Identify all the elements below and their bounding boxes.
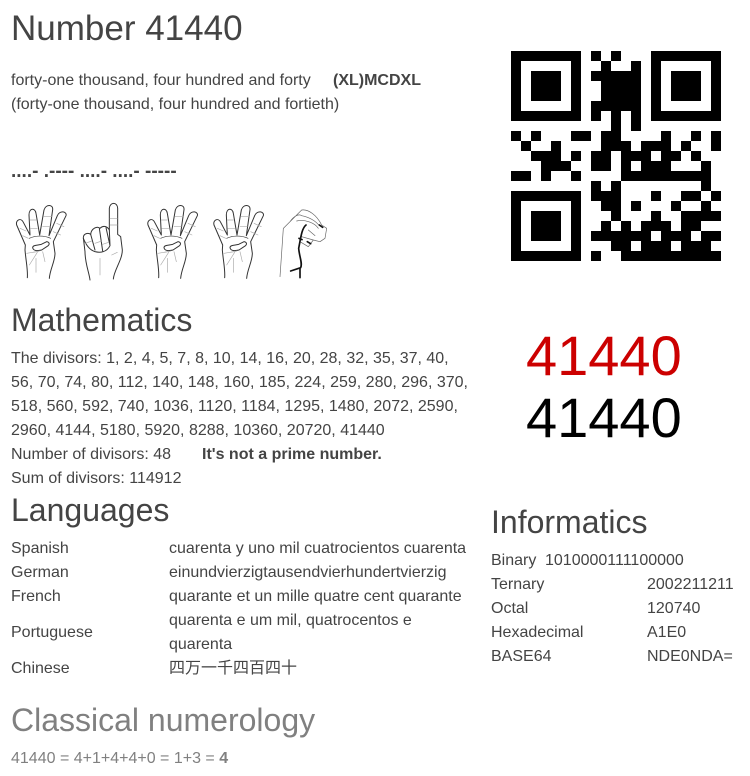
languages table [11,540,466,677]
divisors text: It's not a prime number. [202,446,382,463]
morse code: ....- .---- ....- ....- ----- [11,161,177,182]
language: Spanish: cuarenta y uno mil cuatrocientos cuarenta [169,540,466,557]
language: Spanish: Spanish [11,540,69,557]
heading: Classical numerology: Classical numerology [11,702,315,738]
heading: Informatics: Informatics [491,504,647,540]
language: French: quarante et un mille quatre cent quarante [169,588,462,605]
number red: 41440 [526,324,682,387]
binary [491,552,684,569]
divisors text: 2960, 4144, 5180, 5920, 8288, 10360, 20720, 41440 [11,422,385,439]
language: German [11,564,446,581]
icon: hand sign four [148,205,197,278]
language: French [11,588,462,605]
language: Chinese: 四万一千四百四十 [169,660,297,677]
icon: hand sign four [16,205,66,278]
informatics table [491,552,734,665]
informatics table: 2002211211 [647,576,734,593]
number black: 41440 [526,386,682,449]
heading: Mathematics: Mathematics [11,302,192,338]
language: French: French [11,588,61,605]
octal [491,600,700,617]
base64 [491,648,733,665]
number in words: (XL)MCDXL [333,72,421,89]
icon: hand sign zero [280,210,327,278]
number in words: forty-one thousand, four hundred and forty [11,72,311,89]
language: Portuguese: quarenta [169,636,232,653]
numerology sum: 41440 = 4+1+4+4+0 = 1+3 = 4 [11,750,228,767]
language: Portuguese [11,612,412,653]
base64: BASE64 [491,648,551,665]
icon: hand sign four [214,205,263,278]
language: Chinese [11,659,297,677]
title: Number 41440 [11,9,243,48]
divisors text: The divisors: 1, 2, 4, 5, 7, 8, 10, 14, 16, 20, 28, 32, 35, 37, 40, [11,350,449,367]
hexadecimal [491,624,686,641]
language: German: German [11,564,69,581]
divisors text: Number of divisors: 48 [11,446,171,463]
informatics table: A1E0 [647,624,686,641]
divisors text: 518, 560, 592, 740, 1036, 1120, 1184, 1295, 1480, 2072, 2590, [11,398,458,415]
hexadecimal: Hexadecimal [491,624,583,641]
language: Chinese: Chinese [11,660,70,677]
heading: Languages: Languages [11,492,169,528]
language: Spanish [11,540,466,557]
divisors text: 56, 70, 74, 80, 112, 140, 148, 160, 185, 224, 259, 280, 296, 370, [11,374,468,391]
ternary [491,576,734,593]
sign language hands [16,202,327,280]
language: Portuguese: Portuguese [11,624,93,641]
QR code [511,51,721,261]
informatics table: 1010000111100000 [545,552,684,569]
language: Portuguese: quarenta e um mil, quatrocentos e [169,612,412,629]
divisors text [11,350,468,487]
icon: hand sign one [83,203,122,280]
informatics table: NDE0NDA= [647,648,733,665]
number in words [11,72,421,113]
ternary: Ternary [491,576,544,593]
language: German: einundvierzigtausendvierhundertvierzig [169,564,446,581]
informatics table: 120740 [647,600,700,617]
number in words: (forty-one thousand, four hundred and fortieth) [11,96,339,113]
divisors text: Sum of divisors: 114912 [11,470,181,487]
octal: Octal [491,600,528,617]
binary: Binary [491,552,536,569]
